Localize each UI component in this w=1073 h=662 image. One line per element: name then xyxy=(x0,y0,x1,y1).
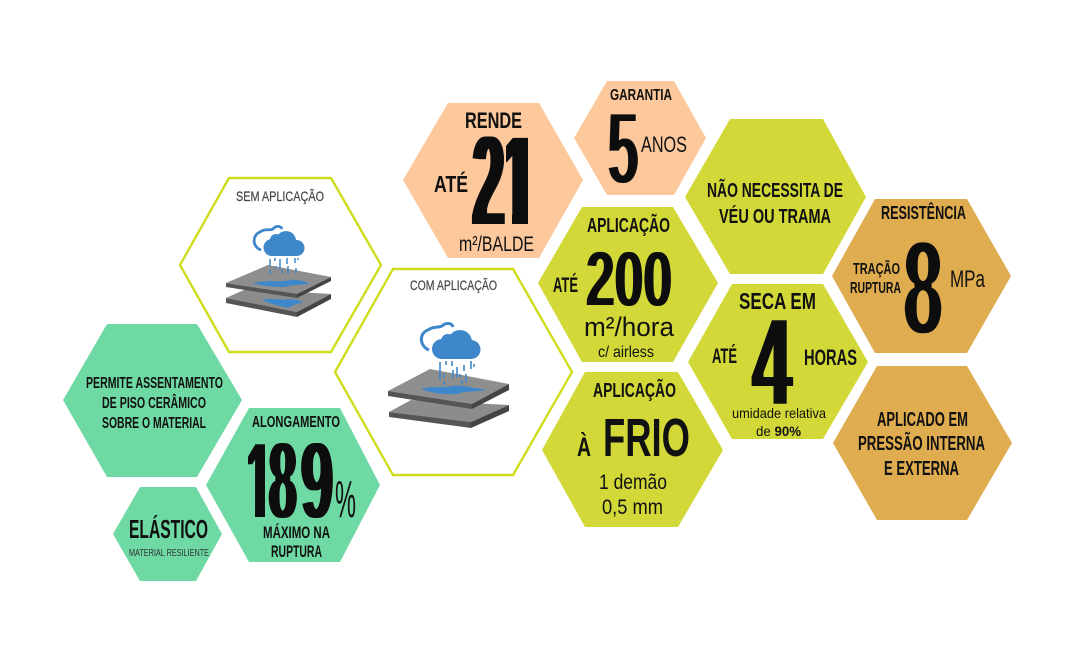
number: 189 percent: 8 xyxy=(269,419,296,543)
unit: horas: HORAS xyxy=(804,345,857,370)
icon: rain over slabs, water passes through xyxy=(226,226,331,317)
text: máximo na ruptura xyxy=(263,523,330,561)
text: não necessita de véu ou trama xyxy=(707,179,843,228)
panel: aplicação até 200 xyxy=(538,207,718,362)
text: demão e espessura xyxy=(599,471,667,519)
number: 5: 5 xyxy=(608,91,638,207)
note: umidade relativa: umidade relativa xyxy=(732,405,826,421)
label: sem aplicação: SEM APLICAÇÃO xyxy=(236,188,324,204)
text: aplicado em pressão interna e externa: APLICADO EM xyxy=(877,409,968,431)
panel: resistência xyxy=(832,199,1011,363)
label: com aplicação: COM APLICAÇÃO xyxy=(410,277,497,293)
number: 189 percent: 9 xyxy=(301,419,333,543)
unit: m²/balde: m²/BALDE xyxy=(459,233,534,256)
unit: anos: ANOS xyxy=(641,132,687,157)
panel: aplicado em pressão xyxy=(833,366,1012,520)
text: permite assentamento: DE PISO CERÂMICO xyxy=(102,393,206,412)
unit: MPa: MPa xyxy=(950,266,985,293)
panel: elástico xyxy=(113,487,222,581)
panel: não necessita xyxy=(685,119,866,274)
panel: alongamento xyxy=(206,408,380,562)
heading: aplicação: APLICAÇÃO xyxy=(587,214,670,237)
label: até: ATÉ xyxy=(553,274,578,297)
text: não necessita de véu ou trama: NÃO NECESSITA DE xyxy=(707,179,843,202)
text: aplicado em pressão interna e externa: E EXTERNA xyxy=(884,458,959,480)
number: 21: 1 xyxy=(498,107,538,254)
text: permite assentamento: PERMITE ASSENTAMENTO xyxy=(86,375,223,392)
note: umidade relativa xyxy=(732,405,826,439)
label: até: ATÉ xyxy=(434,170,468,197)
icon: rain over slabs, water retained xyxy=(388,323,509,428)
label: tração ruptura: TRAÇÃO xyxy=(853,258,900,278)
panel: rende xyxy=(403,103,583,258)
number: 21 xyxy=(472,136,528,224)
panel: com aplicação xyxy=(335,269,572,475)
heading: alongamento: ALONGAMENTO xyxy=(252,414,340,431)
label: tração ruptura xyxy=(850,258,901,297)
heading: elástico: ELÁSTICO xyxy=(129,514,208,544)
text: aplicado em pressão interna e externa xyxy=(858,409,985,480)
number: 21: 2 xyxy=(473,107,504,254)
heading: frio: FRIO xyxy=(603,408,690,468)
text: demão e espessura: 0,5 mm xyxy=(602,496,663,519)
text: permite assentamento xyxy=(86,375,223,432)
label: à: À xyxy=(577,431,591,462)
heading: rende: RENDE xyxy=(465,108,522,133)
panel: garantia xyxy=(574,81,706,207)
heading: garantia: GARANTIA xyxy=(610,87,672,104)
label: tração ruptura: RUPTURA xyxy=(850,280,901,297)
note: c/ airless: c/ airless xyxy=(598,344,654,361)
panel: seca em 4 horas xyxy=(688,284,868,439)
heading: seca em: SECA EM xyxy=(739,288,816,314)
text: material resiliente: MATERIAL RESILIENTE xyxy=(129,548,209,559)
unit: m²/hora: m²/hora xyxy=(584,312,675,342)
heading: resistência: RESISTÊNCIA xyxy=(881,202,966,223)
panel: aplicação à frio xyxy=(542,372,723,527)
text: máximo na ruptura: MÁXIMO NA xyxy=(263,523,330,542)
number: 189 percent xyxy=(248,443,356,518)
text: não necessita de véu ou trama: VÉU OU TRAMA xyxy=(719,205,831,228)
number: 200: 200 xyxy=(586,234,672,323)
note: umidade relativa: de 90% xyxy=(756,423,802,439)
panel: permite assentamento xyxy=(63,324,242,477)
number: 8: 8 xyxy=(904,214,942,363)
panel: alongamento: % xyxy=(335,471,356,529)
panel: sem aplicação xyxy=(180,178,381,352)
text: permite assentamento: SOBRE O MATERIAL xyxy=(102,415,206,432)
number: 189 percent: 1 xyxy=(247,419,271,543)
heading: aplicação: APLICAÇÃO xyxy=(593,379,676,402)
text: aplicado em pressão interna e externa: PRESSÃO INTERNA xyxy=(858,432,985,455)
text: demão e espessura: 1 demão xyxy=(599,471,667,494)
text: máximo na ruptura: RUPTURA xyxy=(271,542,322,561)
label: até: ATÉ xyxy=(712,345,737,368)
number: 4: 4 xyxy=(752,291,792,433)
